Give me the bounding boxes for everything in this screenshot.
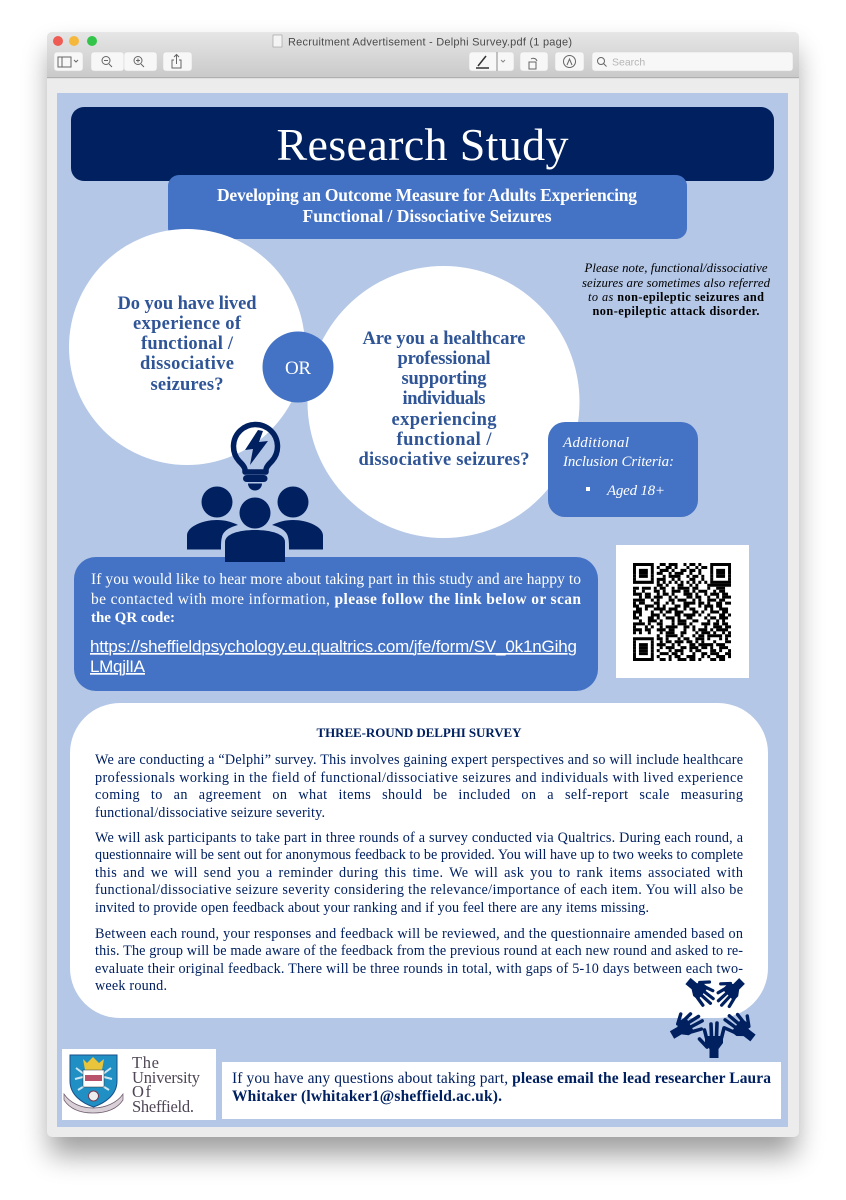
logo wordmark: Sheffield. xyxy=(132,1097,194,1116)
paragraph 1: coming to an agreement on what items should be included on a self-report scale measuring xyxy=(95,787,743,803)
logo crest xyxy=(64,1055,123,1113)
circle: lived experience xyxy=(69,229,305,465)
paragraph 3: evaluate their original feedback. There will be three rounds in total, with gaps of 5-10 days between each two- xyxy=(95,961,743,977)
circle: healthcare professional: professional xyxy=(398,349,490,369)
toolbar icons xyxy=(58,52,606,71)
additional inclusion criteria xyxy=(548,422,698,517)
circle: lived experience: seizures? xyxy=(150,375,224,395)
toolbar buttons xyxy=(54,52,793,71)
icon: people xyxy=(187,486,323,562)
note on terminology xyxy=(582,261,771,318)
additional inclusion criteria: Inclusion Criteria: xyxy=(562,454,674,470)
circle: healthcare professional: Are you a healthcare xyxy=(362,329,526,349)
paragraph 3: week round. xyxy=(95,978,167,994)
paragraph 2: functional/dissociative seizure severity considering the relevance/importance of each item. You will also be xyxy=(95,882,743,898)
additional inclusion criteria: Aged 18+ xyxy=(606,483,665,499)
traffic lights xyxy=(53,36,97,46)
subtitle banner xyxy=(168,175,687,239)
title bar xyxy=(47,32,799,78)
subtitle banner: Developing an Outcome Measure for Adults Experiencing xyxy=(217,185,637,205)
paragraph 1: professionals working in the field of functional/dissociative seizures and individuals with lived experience xyxy=(95,770,743,786)
circle: healthcare professional: supporting xyxy=(402,369,487,389)
title banner: Research Study xyxy=(276,119,568,170)
paragraph 3: Between each round, your responses and feedback will be reviewed, and the questionnaire amended based on xyxy=(95,926,743,942)
circle: healthcare professional: individuals xyxy=(402,389,486,409)
logo wordmark xyxy=(132,1053,201,1116)
circle: lived experience: Do you have lived xyxy=(118,294,257,314)
paragraph 3 xyxy=(95,926,743,994)
circle: lived experience: experience of xyxy=(133,314,242,334)
call to action panel: If you would like to hear more about taking part in this study and are happy to xyxy=(91,571,581,588)
logo wordmark: The xyxy=(132,1053,159,1072)
paragraph 1: We are conducting a “Delphi” survey. This involves gaining expert perspectives and so will include healthcare xyxy=(95,752,743,768)
OR badge xyxy=(262,332,334,402)
icon: circle of hands xyxy=(665,971,761,1058)
OR badge: OR xyxy=(285,358,311,379)
paragraph 2: this and we will send you a reminder during this time. We will ask you to rank items associated with xyxy=(95,865,743,881)
note on terminology: Please note, functional/dissociative xyxy=(584,261,768,275)
paragraph 1 xyxy=(95,752,743,821)
survey link: LMqjlIA xyxy=(90,657,146,676)
contact box: Whitaker (lwhitaker1@sheffield.ac.uk). xyxy=(232,1088,502,1105)
paragraph 2: invited to provide open feedback about your ranking and if you feel there are any items missing. xyxy=(95,900,649,916)
paragraph 1: functional/dissociative seizure severity. xyxy=(95,805,325,821)
document title: Recruitment Advertisement - Delphi Survey.pdf (1 page) xyxy=(288,36,572,48)
call to action panel xyxy=(74,557,598,691)
icon: lightbulb over people xyxy=(187,424,323,562)
survey link xyxy=(90,637,577,676)
logo wordmark: University xyxy=(132,1068,201,1087)
search placeholder: Search xyxy=(612,56,645,68)
circle: healthcare professional: experiencing xyxy=(392,410,497,430)
paragraph 2: questionnaire will be sent out for anonymous feedback to be provided. You will have up to two weeks to complete xyxy=(95,847,743,863)
contact box xyxy=(222,1062,781,1119)
QR code xyxy=(616,545,749,678)
heading: THREE-ROUND DELPHI SURVEY xyxy=(316,725,522,740)
call to action panel: the QR code: xyxy=(91,610,175,626)
University of Sheffield logo xyxy=(62,1049,216,1120)
paragraph 3: this. The group will be made aware of the feedback from the previous round at each new round and asked to re- xyxy=(95,943,743,959)
note on terminology: to as non-epileptic seizures and xyxy=(588,290,764,304)
logo wordmark: Of xyxy=(132,1082,152,1101)
subtitle banner: Functional / Dissociative Seizures xyxy=(302,206,552,226)
icon: lightbulb xyxy=(234,424,278,491)
call to action panel: be contacted with more information, please follow the link below or scan xyxy=(91,591,581,608)
survey link: https://sheffieldpsychology.eu.qualtrics.com/jfe/form/SV_0k1nGihg xyxy=(90,637,577,656)
poster page xyxy=(57,93,788,1127)
paragraph 2: We will ask participants to take part in three rounds of a survey conducted via Qualtrics. During each round, a xyxy=(95,830,744,846)
contact box: If you have any questions about taking part, please email the lead researcher Laura xyxy=(232,1070,771,1087)
note on terminology: non-epileptic attack disorder. xyxy=(592,304,760,318)
additional inclusion criteria: Additional xyxy=(562,435,629,451)
circle: lived experience: functional / xyxy=(141,334,234,354)
circle: healthcare professional: dissociative seizures? xyxy=(358,450,530,470)
panel: three-round Delphi survey xyxy=(70,703,768,1018)
paragraph 2 xyxy=(95,830,744,916)
circle: healthcare professional: functional / xyxy=(396,430,492,450)
circle: lived experience: dissociative xyxy=(140,354,234,374)
circle: healthcare professional xyxy=(308,266,580,538)
note on terminology: seizures are sometimes also referred xyxy=(582,276,771,290)
title banner xyxy=(71,107,774,181)
